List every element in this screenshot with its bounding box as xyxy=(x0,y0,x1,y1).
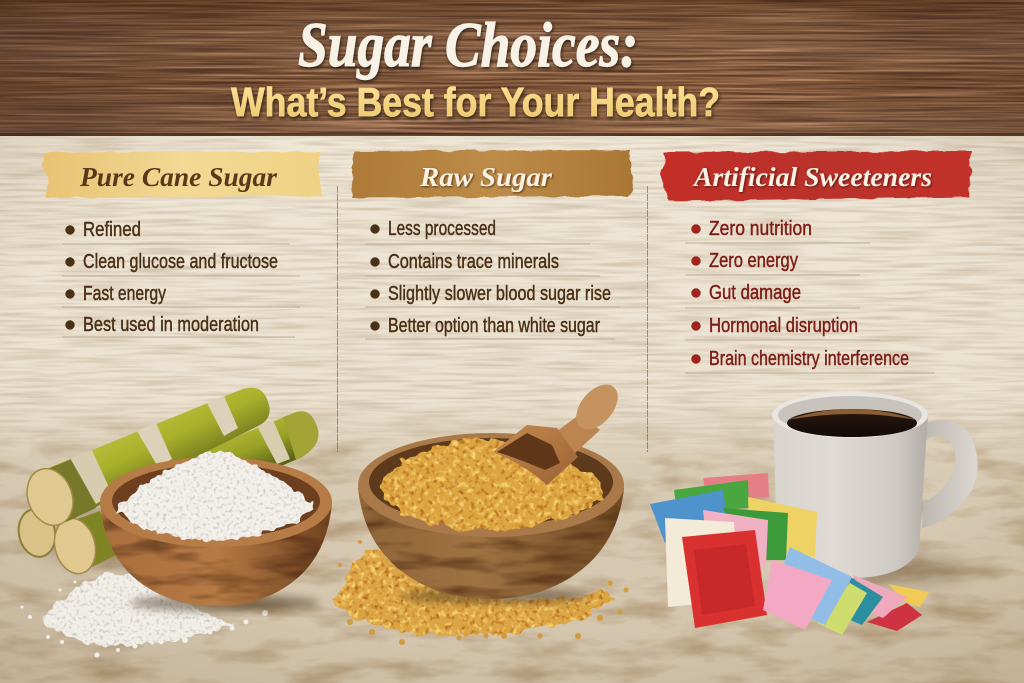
illustration: sweetener packets xyxy=(650,473,929,635)
bullet list: Hormonal disruption xyxy=(709,315,858,337)
bullet list: Clean glucose and fructose xyxy=(83,251,278,273)
banner: Artificial Sweeteners xyxy=(660,151,973,201)
mug body xyxy=(773,415,928,578)
panel: wood header xyxy=(0,0,1024,136)
bullet list: Zero energy xyxy=(709,250,798,272)
banner: Artificial Sweeteners: Artificial Sweeteners xyxy=(692,162,932,192)
mug handle xyxy=(922,420,978,528)
bullet list: Contains trace minerals xyxy=(388,251,559,273)
panel: pure cane sugar column xyxy=(42,152,322,337)
lower left stalk xyxy=(60,511,116,572)
illustration: wooden bowl with raw sugar and scoop xyxy=(358,377,626,604)
banner: Raw Sugar: Raw Sugar xyxy=(419,162,553,192)
heading: Sugar Choices: Sugar Choices: xyxy=(298,9,638,80)
bullet list: Brain chemistry interference xyxy=(709,348,909,370)
banner: Raw Sugar xyxy=(351,150,634,198)
illustration: wooden bowl with white sugar xyxy=(100,450,332,612)
bullet list xyxy=(365,218,620,339)
bullet list xyxy=(62,219,300,337)
banner: Pure Cane Sugar: Pure Cane Sugar xyxy=(79,162,277,192)
bullet list: Less processed xyxy=(388,218,496,240)
subheading: What’s Best for Your Health? xyxy=(231,79,720,125)
coffee xyxy=(787,409,917,437)
panel: artificial sweeteners column xyxy=(660,151,973,373)
back right stalk xyxy=(185,411,318,500)
bullet list: Refined xyxy=(83,219,141,241)
illustration: spilled raw sugar xyxy=(335,540,628,645)
scoop xyxy=(493,377,626,485)
illustration: coffee mug xyxy=(772,392,978,586)
bullet list: Zero nutrition xyxy=(709,218,812,240)
illustration: sugar cane stalks xyxy=(14,388,318,578)
bullet list: Better option than white sugar xyxy=(388,315,600,337)
bullet list: Gut damage xyxy=(709,282,801,304)
bullet list: Fast energy xyxy=(83,283,166,305)
banner: Pure Cane Sugar xyxy=(42,152,322,198)
illustration: white sugar pile xyxy=(20,572,268,658)
front stalk xyxy=(48,388,270,522)
bullet list: Best used in moderation xyxy=(83,314,259,336)
bullet list xyxy=(685,218,935,373)
column divider lines xyxy=(338,186,648,452)
panel: raw sugar column xyxy=(351,150,634,339)
title xyxy=(231,9,720,125)
bullet list: Slightly slower blood sugar rise xyxy=(388,283,611,305)
